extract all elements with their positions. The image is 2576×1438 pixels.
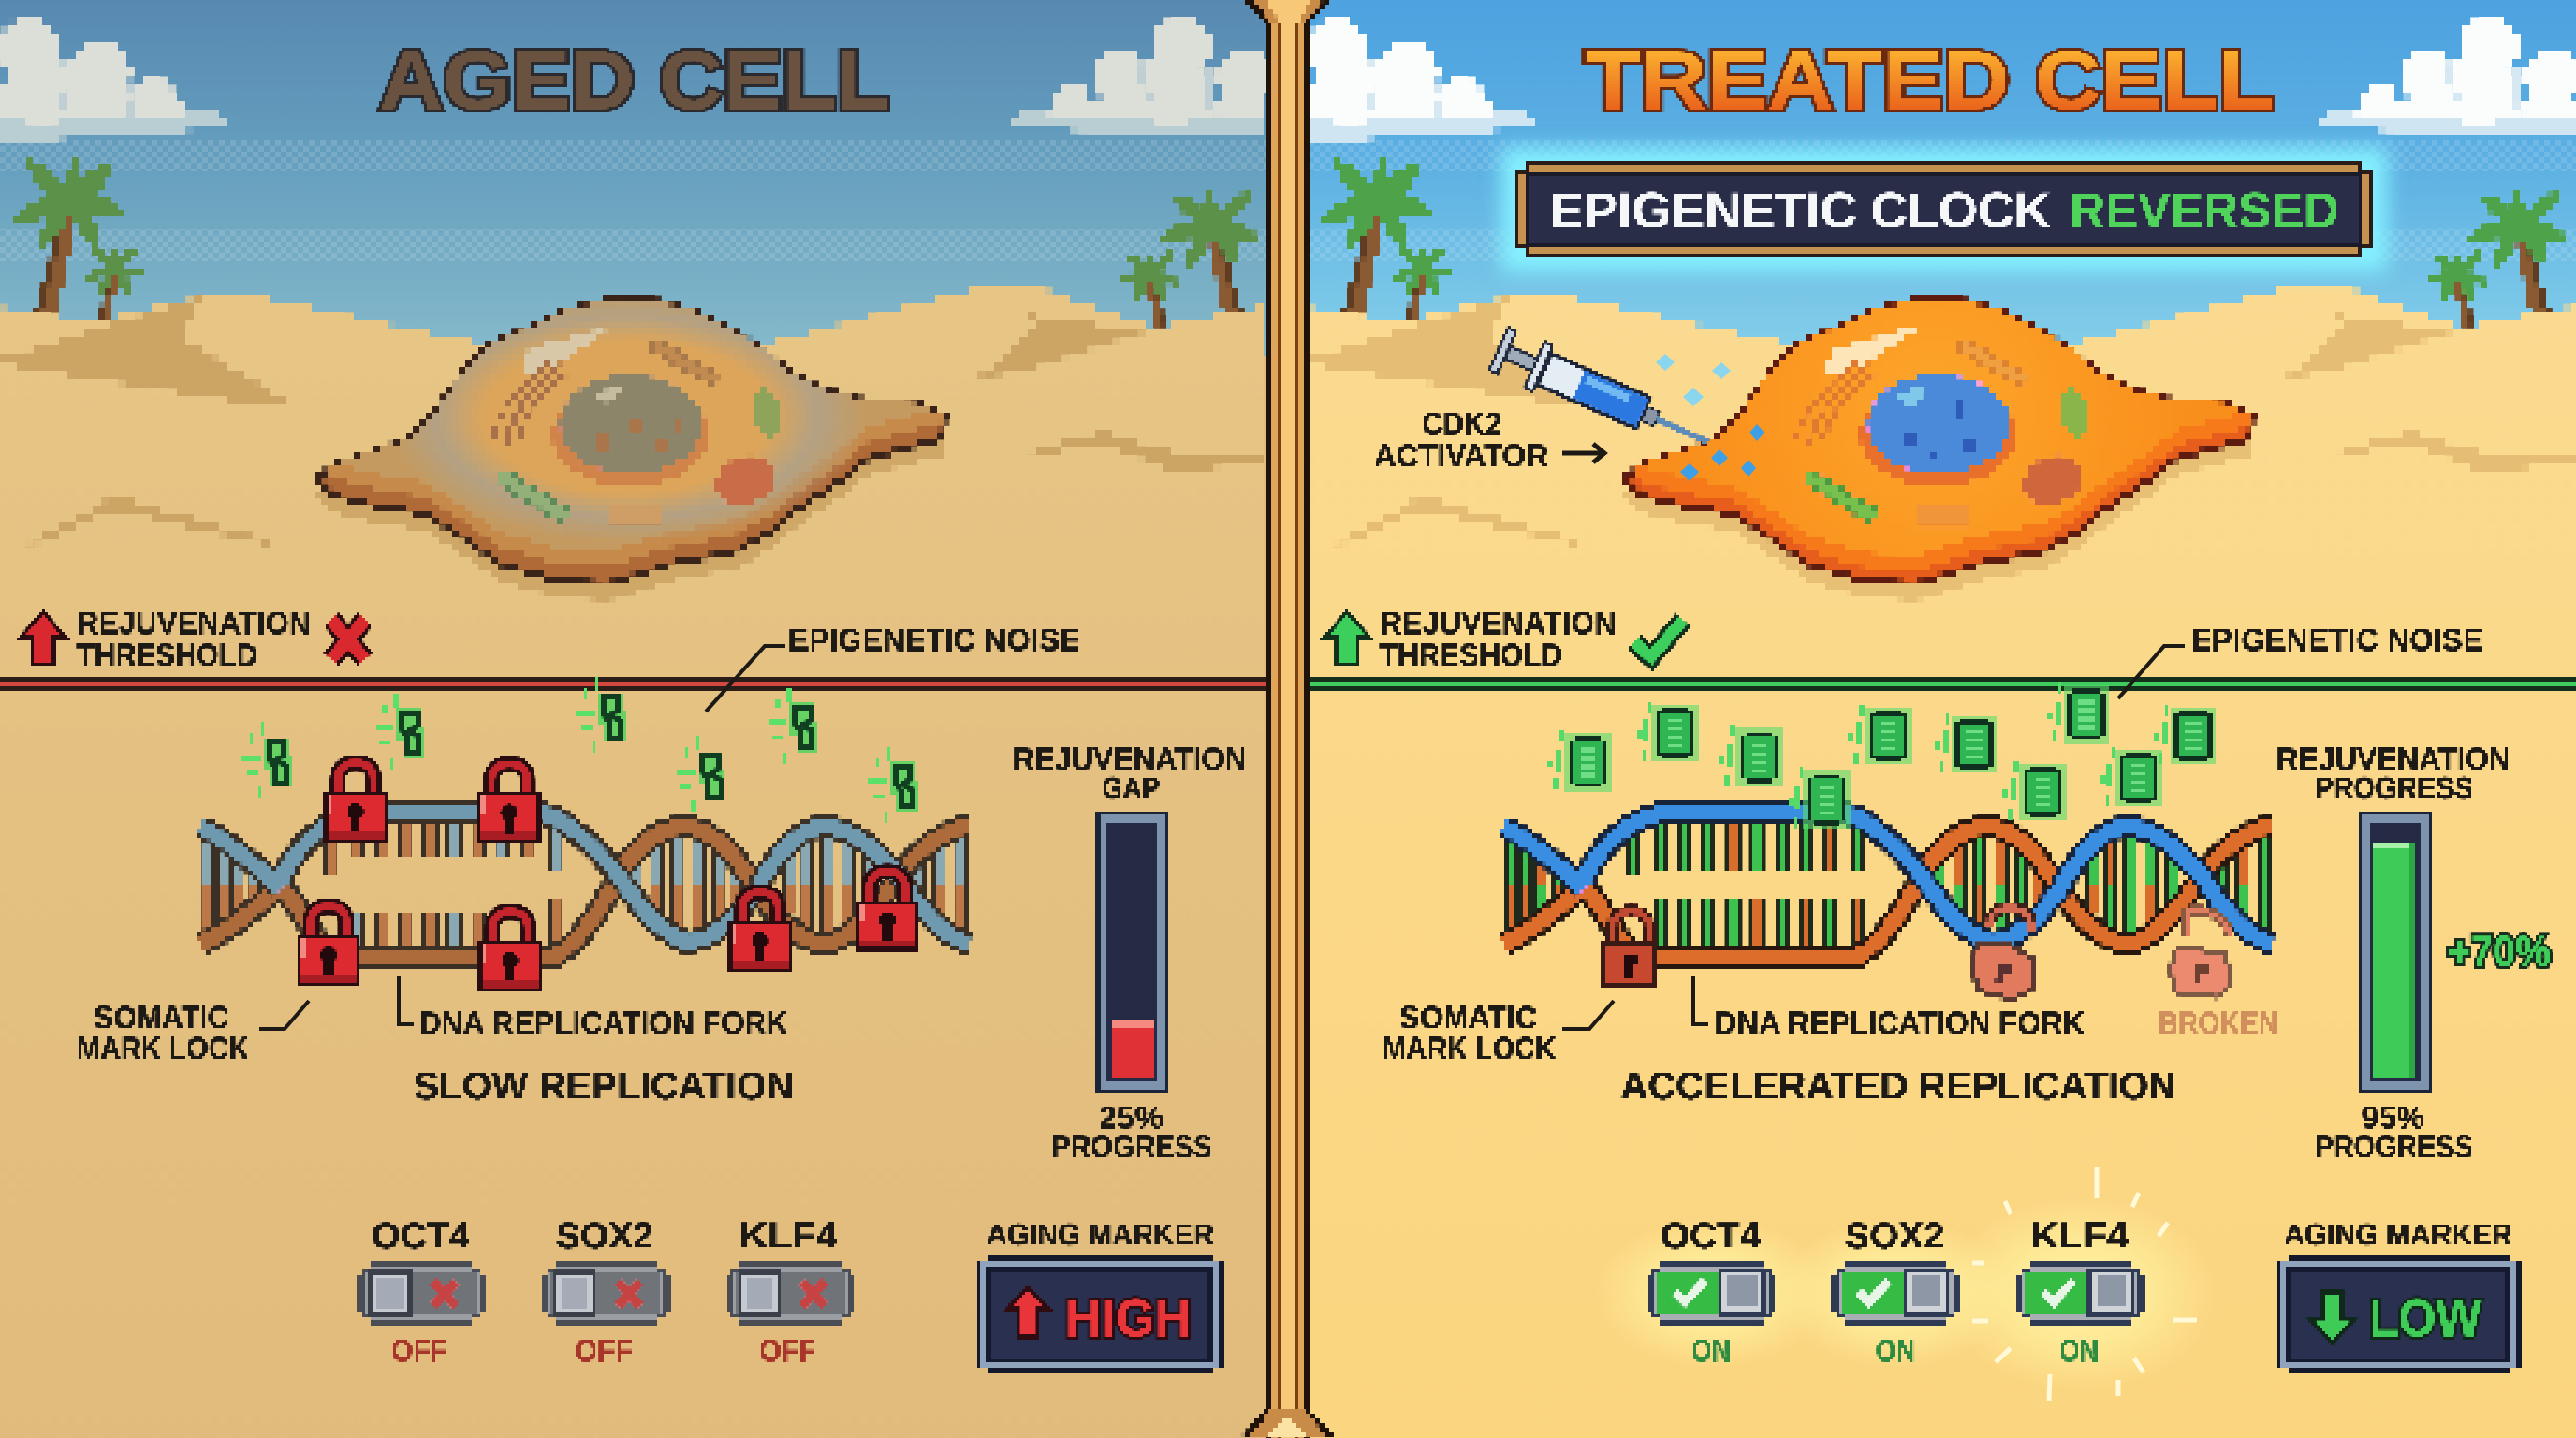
epigenetic noise marks aged xyxy=(242,678,917,822)
value: low: LOW xyxy=(2369,1288,2481,1348)
heading: accelerated replication: ACCELERATED REPLICATION xyxy=(1620,1064,2176,1108)
label: OCT4: OCT4 xyxy=(1661,1216,1761,1256)
red organelle xyxy=(2015,446,2090,515)
sand dunes xyxy=(0,286,1264,548)
icon: green arrow xyxy=(2310,1292,2354,1343)
title: aged cell: AGED CELL xyxy=(379,34,890,126)
treated threshold icons xyxy=(1325,612,1683,664)
label: rejuvenation progress: REJUVENATION xyxy=(2276,742,2510,777)
icon: red up arrow xyxy=(21,612,66,664)
value: high: HIGH xyxy=(1065,1288,1192,1348)
threshold line aged xyxy=(0,677,1266,691)
label: progress: PROGRESS xyxy=(2315,1130,2473,1165)
label: progress: PROGRESS xyxy=(1051,1130,1212,1165)
DNA helix aged xyxy=(200,814,970,958)
status: KLF4 on: ON xyxy=(2059,1334,2099,1369)
label: rejuvenation threshold: REJUVENATION xyxy=(1380,607,1617,641)
icon: red arrow xyxy=(1008,1287,1048,1337)
status: KLF4 off: OFF xyxy=(759,1334,816,1369)
bottom ornament xyxy=(1240,1409,1336,1438)
cell interior xyxy=(1625,272,2252,570)
label: OCT4: OCT4 xyxy=(372,1216,470,1256)
label: progress: PROGRESS xyxy=(2315,771,2473,806)
banner frame xyxy=(1515,161,2373,257)
label: epigenetic noise: EPIGENETIC NOISE xyxy=(788,624,1080,658)
broken lock one xyxy=(1970,908,2033,1000)
value: 25 percent: 25% xyxy=(1099,1101,1164,1136)
sparkle rays around KLF4 xyxy=(1972,1167,2197,1401)
toggle glows treated xyxy=(1595,1195,2216,1391)
label: somatic: SOMATIC xyxy=(1399,1001,1537,1035)
banner text: EPIGENETIC CLOCK xyxy=(1550,183,2051,239)
dither bands xyxy=(1309,140,2576,261)
palm trees xyxy=(1321,159,2572,341)
cell shadow xyxy=(1625,317,2252,600)
DNA helix treated xyxy=(1503,814,2273,958)
blue strand xyxy=(200,814,970,944)
label: aging marker: AGING MARKER xyxy=(2284,1218,2512,1253)
somatic mark lock treated xyxy=(1602,912,1658,987)
label: cdk2: CDK2 xyxy=(1422,407,1501,442)
clouds xyxy=(1307,17,2576,144)
fill: 95 percent xyxy=(2373,843,2416,1078)
aged threshold icons xyxy=(21,612,365,664)
cell interior xyxy=(317,269,944,566)
threshold line treated xyxy=(1308,677,2576,691)
green organelles xyxy=(1807,387,2092,517)
value: 95 percent: 95% xyxy=(2362,1101,2424,1136)
orange strand xyxy=(1503,827,2273,958)
panel: treated cell background xyxy=(1307,0,2576,1438)
label: KLF4: KLF4 xyxy=(2030,1216,2129,1256)
label: aging marker: AGING MARKER xyxy=(987,1218,1214,1253)
status: SOX2 off: OFF xyxy=(575,1334,633,1369)
label: rejuvenation threshold: REJUVENATION xyxy=(77,607,311,641)
broken locks xyxy=(1970,908,2231,1000)
divider column xyxy=(1240,0,1336,1438)
icon: red X xyxy=(331,620,365,659)
text labels treated xyxy=(1374,183,2551,1369)
sand dunes xyxy=(1308,285,2576,1438)
red organelle xyxy=(708,446,783,515)
banner inner xyxy=(1529,176,2359,243)
brown strand xyxy=(200,827,970,958)
dither bands xyxy=(0,140,1266,261)
icon: syringe CDK2 activator xyxy=(1487,324,1719,466)
fill: 25 percent xyxy=(1111,1020,1153,1078)
label: somatic: SOMATIC xyxy=(94,1001,229,1035)
titles xyxy=(379,34,2274,126)
label: KLF4: KLF4 xyxy=(739,1216,838,1256)
organelle highlight and golgi xyxy=(1794,328,2028,445)
cell body xyxy=(317,301,944,583)
icon: blue sparkles xyxy=(1656,354,1764,481)
label: rejuvenation gap: REJUVENATION xyxy=(1013,742,1247,777)
label: threshold: THRESHOLD xyxy=(77,638,257,673)
treated cell illustration xyxy=(1625,272,2252,600)
text labels aged xyxy=(77,607,1247,1369)
clouds xyxy=(0,17,1273,144)
banner: epigenetic clock reversed xyxy=(1501,148,2387,271)
cell body xyxy=(1625,301,2252,583)
value: plus 70 percent: +70% xyxy=(2448,927,2551,976)
aging marker box low xyxy=(2276,1255,2522,1373)
vesicle xyxy=(610,506,663,526)
nucleus xyxy=(1860,374,2017,487)
icon: green up arrow xyxy=(1325,612,1369,664)
title: treated cell: TREATED CELL xyxy=(1585,34,2274,126)
cell shadow xyxy=(317,317,944,600)
heading: slow replication: SLOW REPLICATION xyxy=(414,1064,794,1108)
label: SOX2: SOX2 xyxy=(1845,1216,1944,1256)
rungs xyxy=(1511,824,2264,950)
label: mark lock: MARK LOCK xyxy=(1383,1032,1556,1066)
label: SOX2: SOX2 xyxy=(556,1216,653,1256)
panel: aged cell background xyxy=(0,0,1266,1298)
label: dna replication fork: DNA REPLICATION FORK xyxy=(1715,1006,2085,1041)
label: dna replication fork: DNA REPLICATION FORK xyxy=(419,1006,788,1041)
label: activator: ACTIVATOR xyxy=(1374,439,1548,474)
sky xyxy=(0,0,1266,356)
icon: green check xyxy=(1634,620,1683,657)
aging marker box high xyxy=(976,1255,1223,1373)
epigenetic noise chips treated xyxy=(1548,682,2217,829)
status: OCT4 on: ON xyxy=(1691,1334,1731,1369)
nucleus xyxy=(552,374,710,487)
progress bar treated xyxy=(2359,812,2432,1093)
organelle highlight and golgi xyxy=(491,330,721,445)
label: threshold: THRESHOLD xyxy=(1380,638,1562,673)
blue strand xyxy=(1503,814,2273,944)
vesicle xyxy=(1918,506,1970,526)
somatic mark locks aged xyxy=(297,763,919,991)
label: epigenetic noise: EPIGENETIC NOISE xyxy=(2191,624,2483,658)
banner glow xyxy=(1501,148,2387,271)
leader lines xyxy=(259,444,2185,1029)
green organelles xyxy=(499,386,785,517)
rungs xyxy=(208,826,961,955)
label: broken: BROKEN xyxy=(2159,1006,2278,1041)
label: mark lock: MARK LOCK xyxy=(77,1032,249,1066)
palm trees xyxy=(13,159,1265,341)
progress bar aged xyxy=(1096,812,1168,1093)
aged cell illustration xyxy=(317,269,944,600)
toggles treated xyxy=(1647,1261,2144,1326)
banner text highlight: REVERSED xyxy=(2070,183,2339,239)
status: SOX2 on: ON xyxy=(1876,1334,1915,1369)
status: OCT4 off: OFF xyxy=(391,1334,447,1369)
label: gap: GAP xyxy=(1102,771,1160,806)
sky xyxy=(1309,0,2576,356)
top ornament xyxy=(1244,0,1332,24)
toggles aged xyxy=(358,1261,855,1326)
broken lock two xyxy=(2170,910,2231,997)
